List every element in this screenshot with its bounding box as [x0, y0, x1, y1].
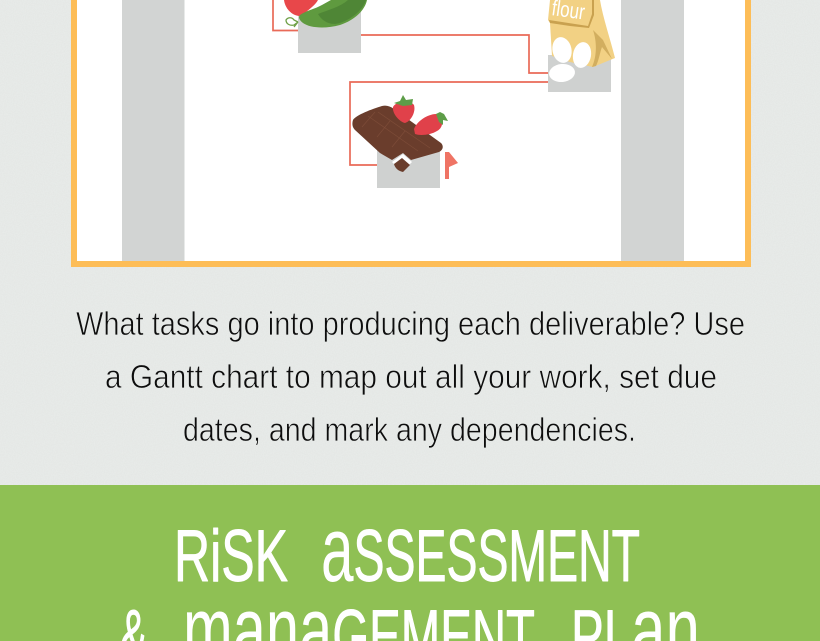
icon: chocolate and strawberries	[352, 95, 448, 172]
panel: green section banner	[0, 485, 820, 641]
heading: risk assessment and management plan: aSSESSMENT	[321, 499, 640, 601]
text block: gantt description: a Gantt chart to map out all your work, set due	[105, 358, 717, 395]
text block: gantt description: dates, and mark any dependencies.	[183, 411, 636, 448]
text block: gantt description	[76, 305, 745, 448]
icon: eggs	[548, 35, 593, 83]
gantt column: right grey	[621, 0, 684, 261]
panel: gantt chart frame	[74, 0, 748, 264]
heading: risk assessment and management plan: RiSK	[174, 516, 288, 597]
icon: milestone flag	[445, 152, 458, 179]
heading: risk assessment and management plan	[120, 499, 700, 641]
icon: flour bag and eggs	[548, 0, 615, 83]
dependency lines	[273, 0, 548, 165]
icon: strawberry right	[414, 114, 442, 135]
icon: tomato and cucumber	[284, 0, 367, 27]
icon: strawberry top	[393, 102, 414, 123]
gantt column: left grey	[122, 0, 184, 261]
task bar: vegetables	[298, 0, 361, 53]
text block: gantt description: What tasks go into producing each deliverable? Use	[76, 305, 745, 342]
task bar: dessert	[377, 148, 440, 188]
task bar: flour and eggs	[548, 55, 611, 92]
